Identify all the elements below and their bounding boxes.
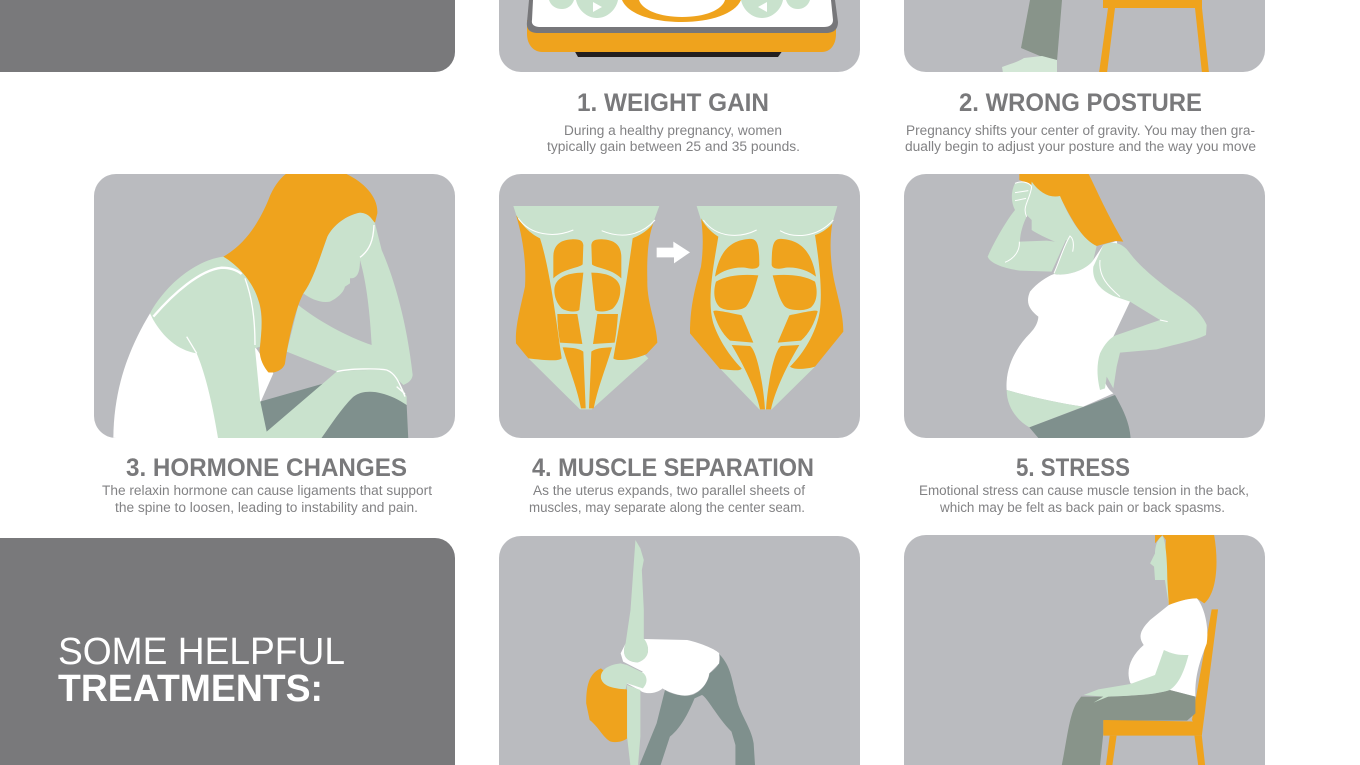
- head-propping arm: [287, 223, 413, 385]
- face: [1150, 536, 1169, 605]
- panel: stress illustration: [904, 173, 1265, 440]
- pants leg and foot: [1002, 0, 1062, 73]
- arm: [1084, 650, 1189, 703]
- head: [601, 663, 647, 689]
- heading: wrong posture: 2. WRONG POSTURE: [959, 89, 1202, 117]
- heading: stress: 5. STRESS: [1016, 454, 1130, 482]
- raised arm: [988, 182, 1067, 272]
- panel: top left dark banner: [0, 0, 455, 72]
- heading: weight gain: 1. WEIGHT GAIN: [577, 89, 769, 117]
- lower arm: [627, 685, 640, 765]
- hair: [1155, 535, 1217, 606]
- text: stress description: [919, 483, 1249, 515]
- hair: [1019, 173, 1123, 246]
- text: weight gain description: typically gain between 25 and 35 pounds.: [547, 139, 800, 154]
- text: muscle separation description: [529, 483, 805, 515]
- arrow: [657, 242, 690, 263]
- panel: hormone changes illustration: [94, 173, 455, 440]
- text: muscle separation description: As the uterus expands, two parallel sheets of: [533, 483, 805, 498]
- panel: helpful treatments banner: [0, 538, 455, 765]
- text: wrong posture description: dually begin to adjust your posture and the way you move: [905, 139, 1256, 154]
- heading: some helpful treatments: [58, 631, 345, 710]
- chair: [1099, 0, 1209, 73]
- text: hormone changes description: the spine to loosen, leading to instability and pain.: [115, 500, 418, 515]
- pants: [260, 383, 408, 440]
- arm on back: [1093, 243, 1207, 390]
- heading: some helpful treatments: SOME HELPFUL: [58, 631, 345, 673]
- white top: [1129, 598, 1207, 697]
- raised arm: [624, 540, 648, 662]
- text: muscle separation description: muscles, may separate along the center seam.: [529, 500, 805, 515]
- hair: [586, 668, 627, 742]
- text: weight gain description: During a healthy pregnancy, women: [564, 123, 782, 138]
- belly: [1007, 390, 1083, 427]
- face: [303, 213, 375, 302]
- pants: [1061, 690, 1195, 765]
- text: wrong posture description: [905, 123, 1256, 154]
- hair: [223, 173, 377, 373]
- panel: yoga stretch illustration: [499, 536, 860, 765]
- heading: hormone changes: 3. HORMONE CHANGES: [126, 454, 407, 482]
- left torso: [513, 206, 659, 409]
- shoulder and arm: [150, 257, 407, 440]
- text: wrong posture description: Pregnancy shifts your center of gravity. You may then gra-: [906, 123, 1255, 138]
- white top: [621, 639, 719, 696]
- chair back and legs: [1106, 609, 1218, 765]
- panel: seated posture illustration: [904, 535, 1265, 765]
- text: stress description: which may be felt as back pain or back spasms.: [939, 500, 1225, 515]
- panel: weight gain illustration: [499, 0, 860, 72]
- text: hormone changes description: The relaxin hormone can cause ligaments that support: [102, 483, 432, 498]
- chair seat: [1103, 720, 1202, 736]
- face and neck: [1026, 182, 1097, 275]
- panel: wrong posture illustration: [904, 0, 1265, 73]
- icon: scale base: [575, 52, 782, 57]
- icon: scale dial: [622, 0, 741, 22]
- right torso: [690, 206, 843, 409]
- panel: muscle separation illustration: [499, 174, 860, 438]
- top: [113, 313, 273, 440]
- heading: some helpful treatments: TREATMENTS:: [58, 668, 323, 710]
- top: [1007, 241, 1130, 407]
- heading: muscle separation: 4. MUSCLE SEPARATION: [532, 454, 814, 482]
- pants: [639, 654, 755, 765]
- text: stress description: Emotional stress can cause muscle tension in the back,: [919, 483, 1249, 498]
- pants: [1029, 395, 1131, 440]
- icon: footprints: [549, 0, 810, 18]
- text: weight gain description: [547, 123, 800, 154]
- text: hormone changes description: [102, 483, 432, 515]
- white contour lines: [153, 225, 405, 397]
- white contour lines: [1005, 182, 1168, 322]
